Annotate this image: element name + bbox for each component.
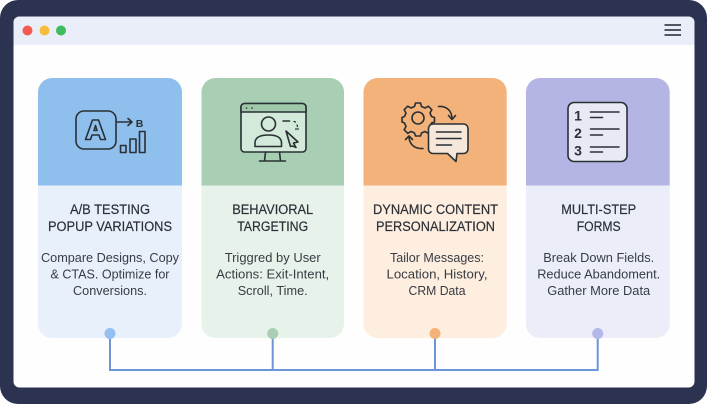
panel: behavioral targeting [202,78,344,339]
text: A/B testing description [41,250,179,298]
text: A/B testing description: & CTAS. Optimize for [50,266,170,282]
text: A/B testing description: Compare Designs, Copy [41,250,179,265]
icon: numbered form list: 2 [574,125,582,141]
icon: A/B test with bars [76,111,145,152]
text: multi-step forms description: Gather More Data [547,283,651,298]
node dot [592,328,603,339]
text: behavioral targeting description [216,250,329,298]
heading: behavioral targeting: BEHAVIORAL [232,202,314,217]
text: behavioral targeting description: Scroll, Time. [238,283,308,298]
icon: gear and message bubble [402,103,468,162]
text: dynamic content description: CRM Data [408,283,466,298]
heading: multi-step forms: MULTI-STEP [561,202,636,217]
heading: A/B testing [48,202,172,234]
text: A/B testing description: Conversions. [73,283,147,298]
heading: dynamic content personalization: PERSONALIZATION [376,219,495,234]
icon: numbered form list: 3 [574,142,582,158]
text: multi-step forms description: Break Down Fields. [543,250,654,265]
icon: monitor with user and cursor [241,104,306,161]
text: multi-step forms description: Reduce Abandoment. [537,266,660,282]
panel: multi-step forms [526,78,670,339]
text: dynamic content description [386,250,488,298]
node dot [267,328,278,339]
text: behavioral targeting description: Triggred by User [225,250,321,265]
heading: multi-step forms [561,202,636,234]
heading: behavioral targeting [232,202,314,234]
text: behavioral targeting description: Actions: Exit-Intent, [216,266,329,282]
panel: dynamic content personalization [364,78,507,339]
heading: A/B testing: A/B TESTING [70,202,150,217]
icon: numbered form list: 1 [574,108,582,124]
node dot [430,328,440,339]
text: dynamic content description: Location, History, [386,266,488,282]
text: dynamic content description: Tailor Messages: [390,250,484,265]
node dot [104,328,116,339]
panel: A/B testing [38,78,182,339]
browser title bar [14,16,694,45]
heading: A/B testing: POPUP VARIATIONS [48,219,172,234]
heading: multi-step forms: FORMS [577,219,621,234]
connector lines [110,334,598,370]
text: multi-step forms description [537,250,660,298]
heading: dynamic content personalization [373,202,498,234]
heading: behavioral targeting: TARGETING [237,219,308,234]
icon: A/B test with bars: B [136,118,144,130]
icon: numbered form list [568,102,627,162]
heading: dynamic content personalization: DYNAMIC CONTENT [373,202,498,217]
